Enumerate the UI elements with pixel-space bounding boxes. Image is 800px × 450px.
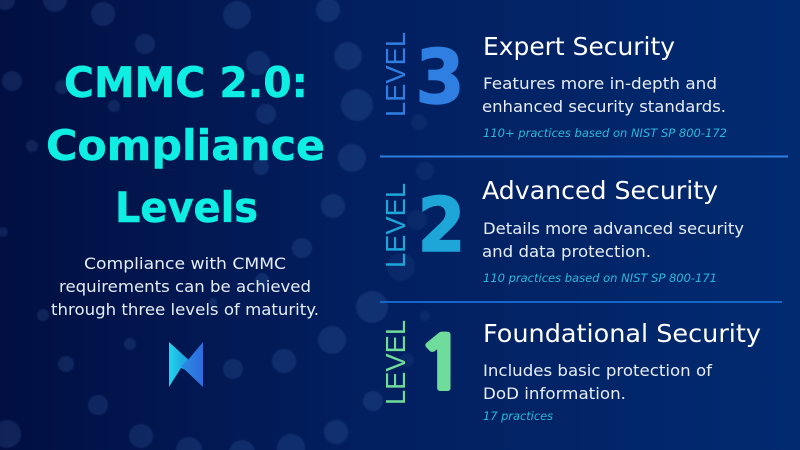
level 3 description [482, 74, 726, 116]
subtitle: requirements can be achieved [59, 277, 311, 296]
subtitle [51, 254, 319, 319]
title: Levels [115, 183, 258, 232]
panel: level 1 [380, 319, 761, 423]
level 1 number: 1 [417, 328, 467, 400]
level 3 description: enhanced security standards. [482, 97, 726, 116]
level 3 description: Features more in-depth and [483, 74, 717, 93]
level 2 heading: Advanced Security [482, 176, 718, 205]
icon: N logo [169, 342, 203, 387]
level 2 description: and data protection. [482, 242, 651, 261]
level 1 description: Includes basic protection of [483, 361, 712, 380]
level 3 practices note: 110+ practices based on NIST SP 800-172 [483, 126, 727, 140]
panel: level 3 [380, 32, 727, 140]
title: CMMC 2.0: [64, 58, 308, 107]
level 1 heading: Foundational Security [483, 319, 761, 348]
level 1 description: DoD information. [483, 384, 626, 403]
level 3 number: 3 [416, 33, 464, 121]
level 2 description [482, 219, 744, 261]
level 3 label: LEVEL [380, 32, 411, 117]
panel: level 2 [380, 176, 744, 285]
level 1 description [483, 361, 712, 403]
subtitle: through three levels of maturity. [51, 300, 319, 319]
level 2 number: 2 [418, 181, 466, 269]
title [46, 58, 325, 232]
title: Compliance [46, 121, 325, 170]
level 1 label: LEVEL [380, 320, 411, 405]
background bubbles [0, 0, 434, 450]
level 1 practices note: 17 practices [483, 409, 553, 423]
level 3 heading: Expert Security [483, 32, 675, 61]
subtitle: Compliance with CMMC [84, 254, 286, 273]
level 2 label: LEVEL [380, 183, 411, 268]
level 2 description: Details more advanced security [483, 219, 744, 238]
level 2 practices note: 110 practices based on NIST SP 800-171 [483, 271, 717, 285]
